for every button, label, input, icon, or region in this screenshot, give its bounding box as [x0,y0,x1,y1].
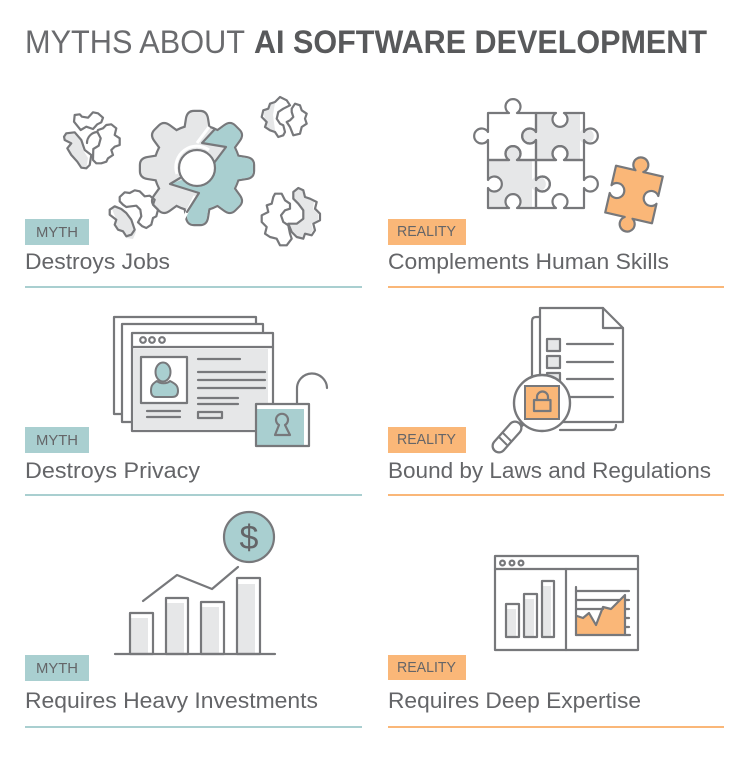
title [25,24,707,60]
heading: Destroys Privacy [25,458,201,483]
myth badge [25,427,89,453]
heading: Complements Human Skills [388,249,669,274]
small gear bottom left [110,190,158,239]
text lines [147,359,265,418]
heading: Bound by Laws and Regulations [388,458,711,483]
panel: reality bound by laws [388,308,724,496]
profile photo [141,357,187,403]
myth badge [25,655,89,681]
myth badge: MYTH [36,224,78,241]
panel: reality complements human skills [388,99,724,288]
reality badge [388,655,466,680]
myth badge: MYTH [36,660,78,677]
title: AI SOFTWARE DEVELOPMENT [254,24,707,60]
bars [506,581,554,637]
myth badge [25,219,89,245]
orange puzzle piece [602,152,666,237]
panel: myth destroys jobs [25,97,362,288]
reality badge: REALITY [397,223,456,240]
window [495,556,638,650]
document [532,308,623,430]
icon: browser windows with open lock [114,317,327,446]
heading: Destroys Jobs [25,249,170,274]
small gear top right [262,97,307,137]
small gear bottom right [262,188,320,245]
icon: document with magnifier [499,308,623,446]
heading: Requires Heavy Investments [25,688,318,713]
stacked windows [114,317,273,431]
puzzle pieces [474,99,598,208]
small gear left [64,112,120,168]
area chart [576,587,630,635]
myth badge: MYTH [36,432,78,449]
icon: analytics dashboard [495,556,638,650]
icon: broken gears [64,97,320,245]
panel: myth requires heavy investments [25,512,362,728]
reality badge [388,219,466,245]
trend line [143,567,238,601]
icon: growth bar chart with coin [115,512,275,654]
bars [115,578,275,654]
panel: reality requires deep expertise [388,556,724,728]
reality badge [388,427,466,453]
dollar coin [224,512,274,562]
open padlock [256,373,327,446]
reality badge: REALITY [397,431,456,448]
large broken gear [141,112,253,224]
dollar coin: $ [240,519,259,557]
panel: myth destroys privacy [25,317,362,496]
title: MYTHS ABOUT [25,24,245,60]
icon: puzzle [474,99,666,237]
heading: Requires Deep Expertise [388,688,641,713]
magnifier [499,375,570,446]
reality badge: REALITY [397,659,456,676]
